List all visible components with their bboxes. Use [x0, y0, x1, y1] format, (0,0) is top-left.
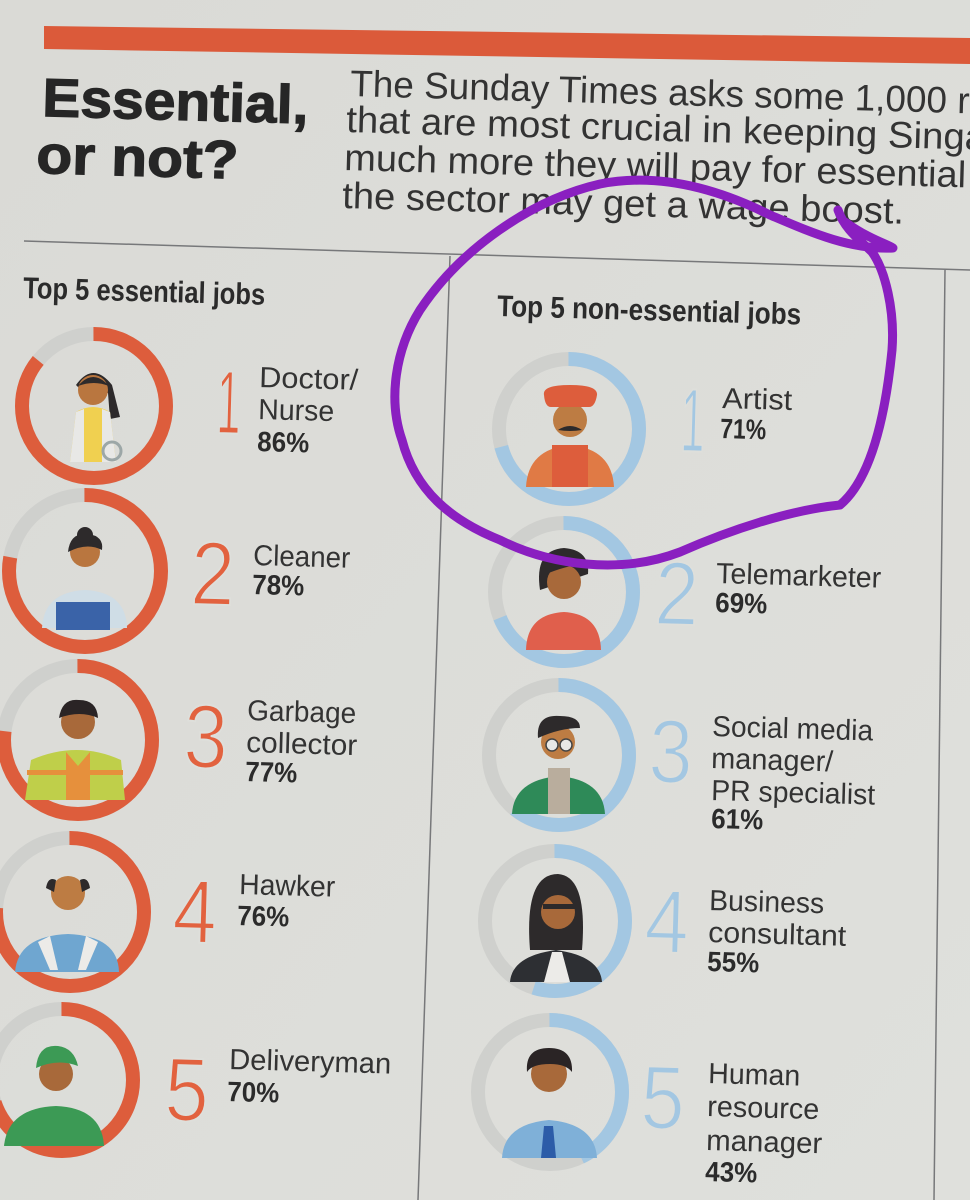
panel: essential job 4: 76% — [237, 900, 290, 932]
panel: non-essential job 5: 43% — [705, 1156, 758, 1188]
panel: non-essential job 3: manager/ — [711, 743, 835, 778]
title: Essential, — [42, 68, 309, 135]
panel: essential job 4: Hawker — [239, 869, 336, 904]
panel: non-essential job 1: 71% — [720, 413, 767, 445]
panel: essential job 2 — [9, 495, 351, 647]
panel: non-essential job 4: 4 — [643, 872, 690, 973]
panel: essential job 2: 78% — [252, 569, 305, 601]
panel: essential job 1: 1 — [215, 353, 242, 454]
panel: non-essential job 3 — [489, 685, 876, 835]
panel: non-essential job 3: 3 — [647, 702, 694, 803]
panel: essential job 4: 4 — [171, 862, 218, 963]
panel: essential job 2: 2 — [189, 524, 236, 625]
title — [36, 68, 309, 191]
panel: essential job 4 — [0, 838, 336, 986]
intro text — [342, 63, 970, 232]
panel: non-essential job 3: 61% — [711, 803, 764, 835]
intro text: the sector may get a wage boost. — [342, 175, 905, 232]
panel: non-essential job 3: PR specialist — [711, 775, 876, 812]
panel: non-essential job 4: Business — [709, 885, 825, 920]
panel: essential job 5 — [0, 1009, 392, 1151]
dividers — [24, 241, 970, 1200]
panel: non-essential job 5: resource — [707, 1091, 820, 1126]
panel: essential job 5: 5 — [163, 1040, 210, 1141]
panel: essential job 3: 77% — [245, 756, 298, 788]
title: or not? — [36, 125, 239, 191]
panel: essential job 3 — [4, 666, 358, 814]
panel: non-essential job 1 — [499, 359, 793, 499]
panel: essential job 3: Garbage — [247, 695, 357, 730]
annotation: purple hand-drawn circle — [395, 180, 893, 565]
panel: essential job 1: Doctor/ — [259, 362, 360, 397]
panel: essential job 5: Deliveryman — [229, 1044, 392, 1081]
panel: essential job 2: Cleaner — [253, 540, 351, 575]
panel: essential job 3: 3 — [182, 687, 229, 788]
panel: non-essential job 5: Human — [708, 1058, 801, 1093]
panel: essential job 3: collector — [246, 727, 358, 762]
panel: non-essential job 5: manager — [706, 1125, 823, 1160]
heading: essential jobs: Top 5 essential jobs — [23, 272, 266, 312]
panel: non-essential job 2: 69% — [715, 587, 768, 619]
panel: essential job 1: Nurse — [258, 394, 335, 428]
panel: non-essential job 5 — [478, 1020, 823, 1188]
panel: non-essential job 4: consultant — [708, 917, 847, 953]
panel: non-essential job 1: 1 — [679, 371, 706, 472]
panel: essential job 5: 70% — [227, 1076, 280, 1108]
panel: non-essential job 3: Social media — [712, 711, 874, 748]
top red bar — [44, 26, 970, 64]
intro text: that are most crucial in keeping Singa — [346, 99, 970, 158]
panel: non-essential job 2: 2 — [653, 544, 700, 645]
panel: non-essential job 4: 55% — [707, 946, 760, 978]
panel: non-essential job 4 — [485, 851, 847, 991]
heading: non-essential jobs: Top 5 non-essential jobs — [497, 290, 802, 331]
panel: non-essential job 1: Artist — [722, 383, 793, 417]
panel: non-essential job 2: Telemarketer — [716, 558, 882, 595]
panel: non-essential job 5: 5 — [639, 1048, 686, 1149]
panel: essential job 1 — [22, 334, 360, 478]
intro text: much more they will pay for essential — [344, 137, 967, 195]
panel: essential job 1: 86% — [257, 426, 310, 458]
panel: non-essential job 2 — [495, 523, 882, 661]
